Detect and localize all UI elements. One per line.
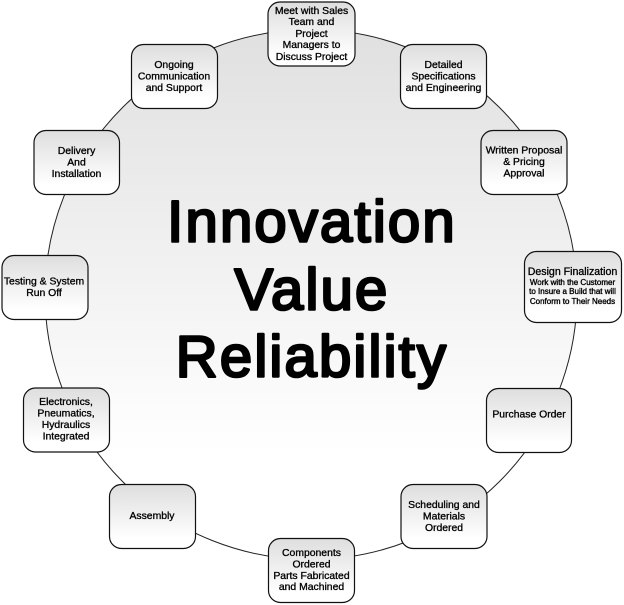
step: purchase order: Purchase Order — [492, 410, 566, 420]
central circle — [45, 30, 577, 560]
step: design finalization: Conform to Their Needs — [530, 297, 615, 306]
central heading: Reliability — [176, 324, 448, 390]
step: written proposal: Written Proposal — [486, 146, 562, 156]
step: testing and system run off — [2, 256, 88, 320]
step: components ordered — [268, 538, 354, 602]
step: meet with sales: Managers to — [283, 40, 341, 51]
step: delivery and installation: Installation — [52, 169, 102, 180]
step: delivery and installation — [34, 130, 120, 194]
step: written proposal — [481, 130, 567, 194]
step: components ordered: Ordered — [292, 560, 331, 570]
step: meet with sales: Discuss Project — [276, 52, 347, 63]
step: electronics: Electronics, — [39, 397, 93, 408]
step: meet with sales: Project — [295, 29, 328, 40]
step: assembly: Assembly — [129, 511, 175, 522]
step: detailed specifications — [400, 44, 486, 108]
step: testing and system run off: Run Off — [26, 288, 62, 299]
step: written proposal: Approval — [503, 168, 545, 180]
step: delivery and installation: And — [67, 158, 86, 168]
step: components ordered: Parts Fabricated — [273, 571, 350, 582]
step: ongoing communication: and Support — [146, 83, 202, 94]
step: ongoing communication — [132, 44, 218, 108]
step: meet with sales: Team and — [289, 17, 335, 28]
step: assembly — [110, 484, 196, 548]
central heading: Innovation — [167, 190, 457, 254]
step: detailed specifications: and Engineering — [406, 83, 482, 94]
step: purchase order — [486, 388, 572, 452]
step: scheduling and materials: Materials — [423, 512, 465, 522]
step: scheduling and materials: Ordered — [425, 523, 463, 534]
step: design finalization: Design Finalization — [528, 266, 617, 278]
step: scheduling and materials — [401, 484, 487, 548]
step: delivery and installation: Delivery — [58, 146, 96, 157]
step: meet with sales — [268, 2, 355, 66]
step: design finalization — [524, 252, 622, 322]
step: design finalization: to Insure a Build that will — [529, 287, 616, 296]
step: electronics: Integrated — [43, 432, 90, 442]
step: meet with sales: Meet with Sales — [275, 6, 348, 17]
step: components ordered: Components — [282, 548, 341, 559]
step: components ordered: and Machined — [279, 582, 344, 593]
step: design finalization: Work with the Customer — [530, 278, 615, 287]
step: testing and system run off: Testing & System — [4, 276, 84, 288]
step: detailed specifications: Detailed — [424, 60, 463, 71]
step: ongoing communication: Ongoing — [154, 60, 194, 71]
central heading: Value — [234, 258, 390, 322]
step: scheduling and materials: Scheduling and — [408, 500, 480, 511]
step: written proposal: & Pricing — [503, 157, 545, 168]
step: electronics — [24, 388, 110, 452]
central heading — [167, 190, 457, 390]
step: ongoing communication: Communication — [138, 72, 210, 82]
step: electronics: Hydraulics — [42, 420, 90, 431]
step: detailed specifications: Specifications — [411, 72, 476, 82]
step: electronics: Pneumatics, — [37, 408, 95, 420]
